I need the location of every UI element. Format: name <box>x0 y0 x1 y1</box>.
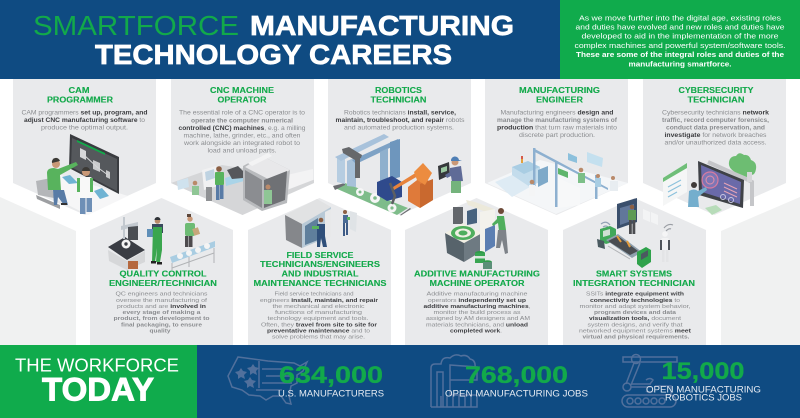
heading: Field service technicians: AND INDUSTRIAL <box>282 268 358 278</box>
heading: Manufacturing engineer: MANUFACTURING <box>519 85 600 95</box>
illustration: cybersecurity monitor, document and cloud <box>663 153 756 215</box>
panel: CAM programmer <box>13 79 156 215</box>
text: Cybersecurity technician description: investigate for network breaches <box>664 132 766 139</box>
text: Quality control description: QC engineers and technicians <box>116 292 208 298</box>
stat: 768,000 open manufacturing jobs: 768,000 <box>465 362 568 389</box>
heading: Cybersecurity technician <box>678 85 754 105</box>
illustration: smart production line with robot <box>597 198 673 268</box>
panel: Field service technicians <box>248 198 391 345</box>
title: SMARTFORCE <box>33 10 239 41</box>
stat: 768,000 open manufacturing jobs <box>445 362 588 399</box>
person <box>688 182 707 207</box>
text: CNC machine operator description: load and unload parts. <box>208 148 277 155</box>
text: Field service description <box>260 292 379 340</box>
heading: Additive manufacturing machine operator <box>414 268 540 288</box>
text: Additive manufacturing description: operators independently set up <box>428 298 526 304</box>
text: Smart systems description: networked equipment systems meet <box>579 328 691 334</box>
panel: CNC machine operator <box>171 79 314 215</box>
icon: factory <box>431 355 477 407</box>
person <box>215 166 224 200</box>
heading: Quality control engineer/technician: QUALITY CONTROL <box>120 268 206 278</box>
panel: The workforce today heading <box>0 345 197 418</box>
panel: green introduction: manufacturing smartforce. <box>628 59 732 68</box>
text: Quality control description: product, from development to <box>114 316 210 322</box>
text: CNC machine operator description: machine, lathe, grinder, etc., and often <box>184 132 301 140</box>
heading: CNC machine operator <box>210 85 274 105</box>
text: Manufacturing engineer description <box>497 110 618 139</box>
person <box>47 158 78 205</box>
decorative side hexagon left <box>0 197 76 345</box>
panel: green introduction: complex machines and powerful system/software tools. <box>574 41 786 50</box>
text: Smart systems description: visualization tools, document <box>589 316 681 322</box>
robot figure <box>660 231 670 262</box>
heading: Field service technicians: MAINTENANCE TECHNICIANS <box>254 278 387 288</box>
heading: CNC machine operator: OPERATOR <box>218 95 267 105</box>
text: Additive manufacturing description: assigned by AM designers and AM <box>426 316 530 322</box>
heading: Additive manufacturing machine operator: MACHINE OPERATOR <box>430 278 525 288</box>
text: CAM programmer description: adjust CNC manufacturing software to <box>24 117 146 124</box>
heading: Additive manufacturing machine operator: ADDITIVE MANUFACTURING <box>414 268 540 278</box>
heading: CNC machine operator: CNC MACHINE <box>210 85 274 95</box>
text: Field service description: technology equipment and tools. <box>268 316 369 322</box>
person <box>185 214 200 247</box>
panel: Cybersecurity technician <box>643 79 786 215</box>
stat: 15,000 open manufacturing robotics jobs: OPEN MANUFACTURING <box>646 384 761 394</box>
heading: CAM programmer <box>47 85 114 105</box>
icon: United States flag map <box>228 357 307 404</box>
illustration: CNC machines and operators <box>171 153 314 215</box>
illustration: additive manufacturing machine and operator <box>445 200 508 269</box>
illustration: service cabinet and technicians <box>285 199 357 248</box>
text: Field service description: the mechanical and electronic <box>272 304 365 310</box>
heading: Smart systems integration technician <box>573 268 695 288</box>
text: Robotics technician description: Robotics technicians install, service, <box>344 110 456 117</box>
panel: green introduction: developed to aid in the implementation of the more <box>582 32 778 41</box>
panel: Smart systems integration technician <box>563 198 706 345</box>
text: Field service description: engineers install, maintain, and repair <box>260 298 379 304</box>
panel: Robotics technician <box>328 79 471 216</box>
text: Smart systems description: connectivity technologies to <box>590 298 681 304</box>
panel: Manufacturing engineer <box>485 79 628 215</box>
text: CAM programmer description <box>22 110 148 132</box>
panel: green introduction: As we move further into the digital age, existing roles <box>579 13 781 22</box>
panel: Additive manufacturing machine operator <box>405 198 548 345</box>
panel: workforce statistics <box>197 345 800 418</box>
text: Additive manufacturing description: monitor the build process as <box>434 310 521 316</box>
person <box>595 174 601 187</box>
text: Cybersecurity technician description <box>662 110 770 147</box>
heading: Manufacturing engineer: ENGINEER <box>536 95 584 105</box>
header: blue title band <box>0 0 560 79</box>
icon: robot arm on tracks <box>622 354 677 407</box>
person <box>192 181 199 195</box>
person <box>529 180 535 196</box>
title <box>33 10 514 70</box>
illustration: inspection machine, inspectors and parts table <box>108 214 215 270</box>
text: Smart systems description: monitor and adapt system behavior, <box>580 304 691 310</box>
heading: Quality control engineer/technician: ENGINEER/TECHNICIAN <box>109 278 217 288</box>
text: CNC machine operator description <box>178 110 306 155</box>
text: Robotics technician description: and automated production systems. <box>344 125 454 132</box>
heading: Cybersecurity technician: TECHNICIAN <box>688 95 744 105</box>
text: Field service description: preventative maintenance and to <box>267 328 371 334</box>
heading: Cybersecurity technician: CYBERSECURITY <box>678 85 754 95</box>
text: Cybersecurity technician description: traffic, record computer forensics, <box>662 117 769 124</box>
text: Robotics technician description <box>336 110 464 132</box>
heading: Field service technicians: FIELD SERVICE <box>286 250 354 260</box>
text: CAM programmer description: produce the optimal output. <box>41 125 128 132</box>
title: TECHNOLOGY CAREERS <box>95 39 452 70</box>
text: Quality control description: every stage of making a <box>122 310 201 316</box>
decorative side hexagon right <box>721 197 800 345</box>
person <box>610 176 618 191</box>
text: CNC machine operator description: operate the computer numerical <box>191 117 293 124</box>
stat: 634,000 U.S. manufacturers <box>278 362 384 399</box>
stat: 15,000 open manufacturing robotics jobs <box>646 358 761 403</box>
text: Field service description: functions of manufacturing <box>275 310 362 316</box>
stat: 15,000 open manufacturing robotics jobs: 15,000 <box>662 358 744 385</box>
text: Smart systems description: virtual and physical requirements. <box>582 334 690 340</box>
heading: CAM programmer: CAM <box>68 85 90 95</box>
person <box>343 210 352 236</box>
text: Manufacturing engineer description: discrete part production. <box>519 132 595 139</box>
stat: 15,000 open manufacturing robotics jobs: ROBOTICS JOBS <box>665 393 742 403</box>
text: CNC machine operator description: controlled (CNC) machines , e.g. a milling <box>178 125 306 132</box>
illustration: pale blue production floor with engineers <box>487 148 628 214</box>
person <box>77 167 93 214</box>
illustration: two programmers at a large screen <box>36 134 128 215</box>
heading: Robotics technician <box>370 85 426 105</box>
stat: 634,000 U.S. manufacturers: U.S. MANUFACTURERS <box>278 389 384 399</box>
text: Field service description: Field service technicians and <box>274 292 354 298</box>
heading: CAM programmer: PROGRAMMER <box>47 95 114 105</box>
person <box>312 218 327 247</box>
text: Quality control description: products and are involved in <box>117 304 206 310</box>
person <box>264 184 272 204</box>
illustration: robotic gantry, conveyor and technician <box>333 134 463 216</box>
heading: Field service technicians <box>254 250 387 288</box>
person <box>578 168 585 183</box>
text: Smart systems description <box>579 292 691 340</box>
heading: Field service technicians: TECHNICIANS/ENGINEERS <box>260 259 380 269</box>
panel: green introduction: These are some of the integral roles and duties of the <box>576 50 784 59</box>
text: CNC machine operator description: work alongside an integrated robot to <box>183 140 301 147</box>
text: Manufacturing engineer description: manage the manufacturing systems of <box>497 117 618 124</box>
panel: Quality control engineer/technician <box>90 198 233 345</box>
text: Cybersecurity technician description: and/or unauthorized data access. <box>664 140 767 147</box>
text: Field service description: Often, they travel from site to site for <box>261 322 378 328</box>
person <box>492 208 508 254</box>
stat: 768,000 open manufacturing jobs: OPEN MANUFACTURING JOBS <box>445 389 588 399</box>
heading: Smart systems integration technician: SMART SYSTEMS <box>596 268 672 278</box>
text: Cybersecurity technician description: Cybersecurity technicians network <box>662 110 770 117</box>
text: Quality control description: final packaging, to ensure <box>121 322 203 328</box>
text: Quality control description: oversee the manufacturing of <box>116 298 207 304</box>
text: CNC machine operator description: The essential role of a CNC operator is to <box>179 110 306 117</box>
text: Additive manufacturing description: materials technicians, and unload <box>426 322 528 328</box>
panel: green introduction: and duties have evolved and new roles and duties have <box>576 22 784 32</box>
heading: Quality control engineer/technician <box>109 268 217 288</box>
heading: Manufacturing engineer <box>519 85 600 105</box>
person <box>147 217 163 264</box>
text: Quality control description <box>114 292 210 334</box>
heading: Smart systems integration technician: INTEGRATION TECHNICIAN <box>573 278 695 288</box>
person <box>445 156 463 193</box>
text: Additive manufacturing description: Additive manufacturing machine <box>426 292 528 298</box>
panel: green introduction <box>560 0 800 79</box>
text: Cybersecurity technician description: conduct data preservation, and <box>666 125 765 132</box>
heading: Robotics technician: TECHNICIAN <box>370 95 426 105</box>
text: Additive manufacturing description: completed work . <box>450 328 502 334</box>
heading: Robotics technician: ROBOTICS <box>375 85 422 95</box>
text: Robotics technician description: maintain, troubleshoot, and repair robots <box>336 117 464 124</box>
text: CAM programmer description: CAM programmers set up, program, and <box>22 110 148 117</box>
person <box>628 205 636 234</box>
text: Additive manufacturing description <box>424 292 531 334</box>
text: Manufacturing engineer description: production that turn raw materials into <box>497 125 618 132</box>
title: MANUFACTURING <box>250 10 514 41</box>
panel: The workforce today heading: TODAY <box>42 372 154 408</box>
text: Additive manufacturing description: additive manufacturing machines , <box>424 304 531 310</box>
panel: The workforce today heading: THE WORKFORCE <box>15 355 179 376</box>
text: Smart systems description: program devices and data <box>594 310 677 316</box>
stat: 634,000 U.S. manufacturers: 634,000 <box>279 362 383 389</box>
text: Smart systems description: system designs, and verify that <box>588 322 683 328</box>
text: Smart systems description: SSITs integrate equipment with <box>586 292 684 298</box>
text: Field service description: solve problems that may arise. <box>272 334 365 340</box>
text: Manufacturing engineer description: Manufacturing engineers design and <box>500 110 614 117</box>
text: Quality control description: quality <box>150 328 171 334</box>
